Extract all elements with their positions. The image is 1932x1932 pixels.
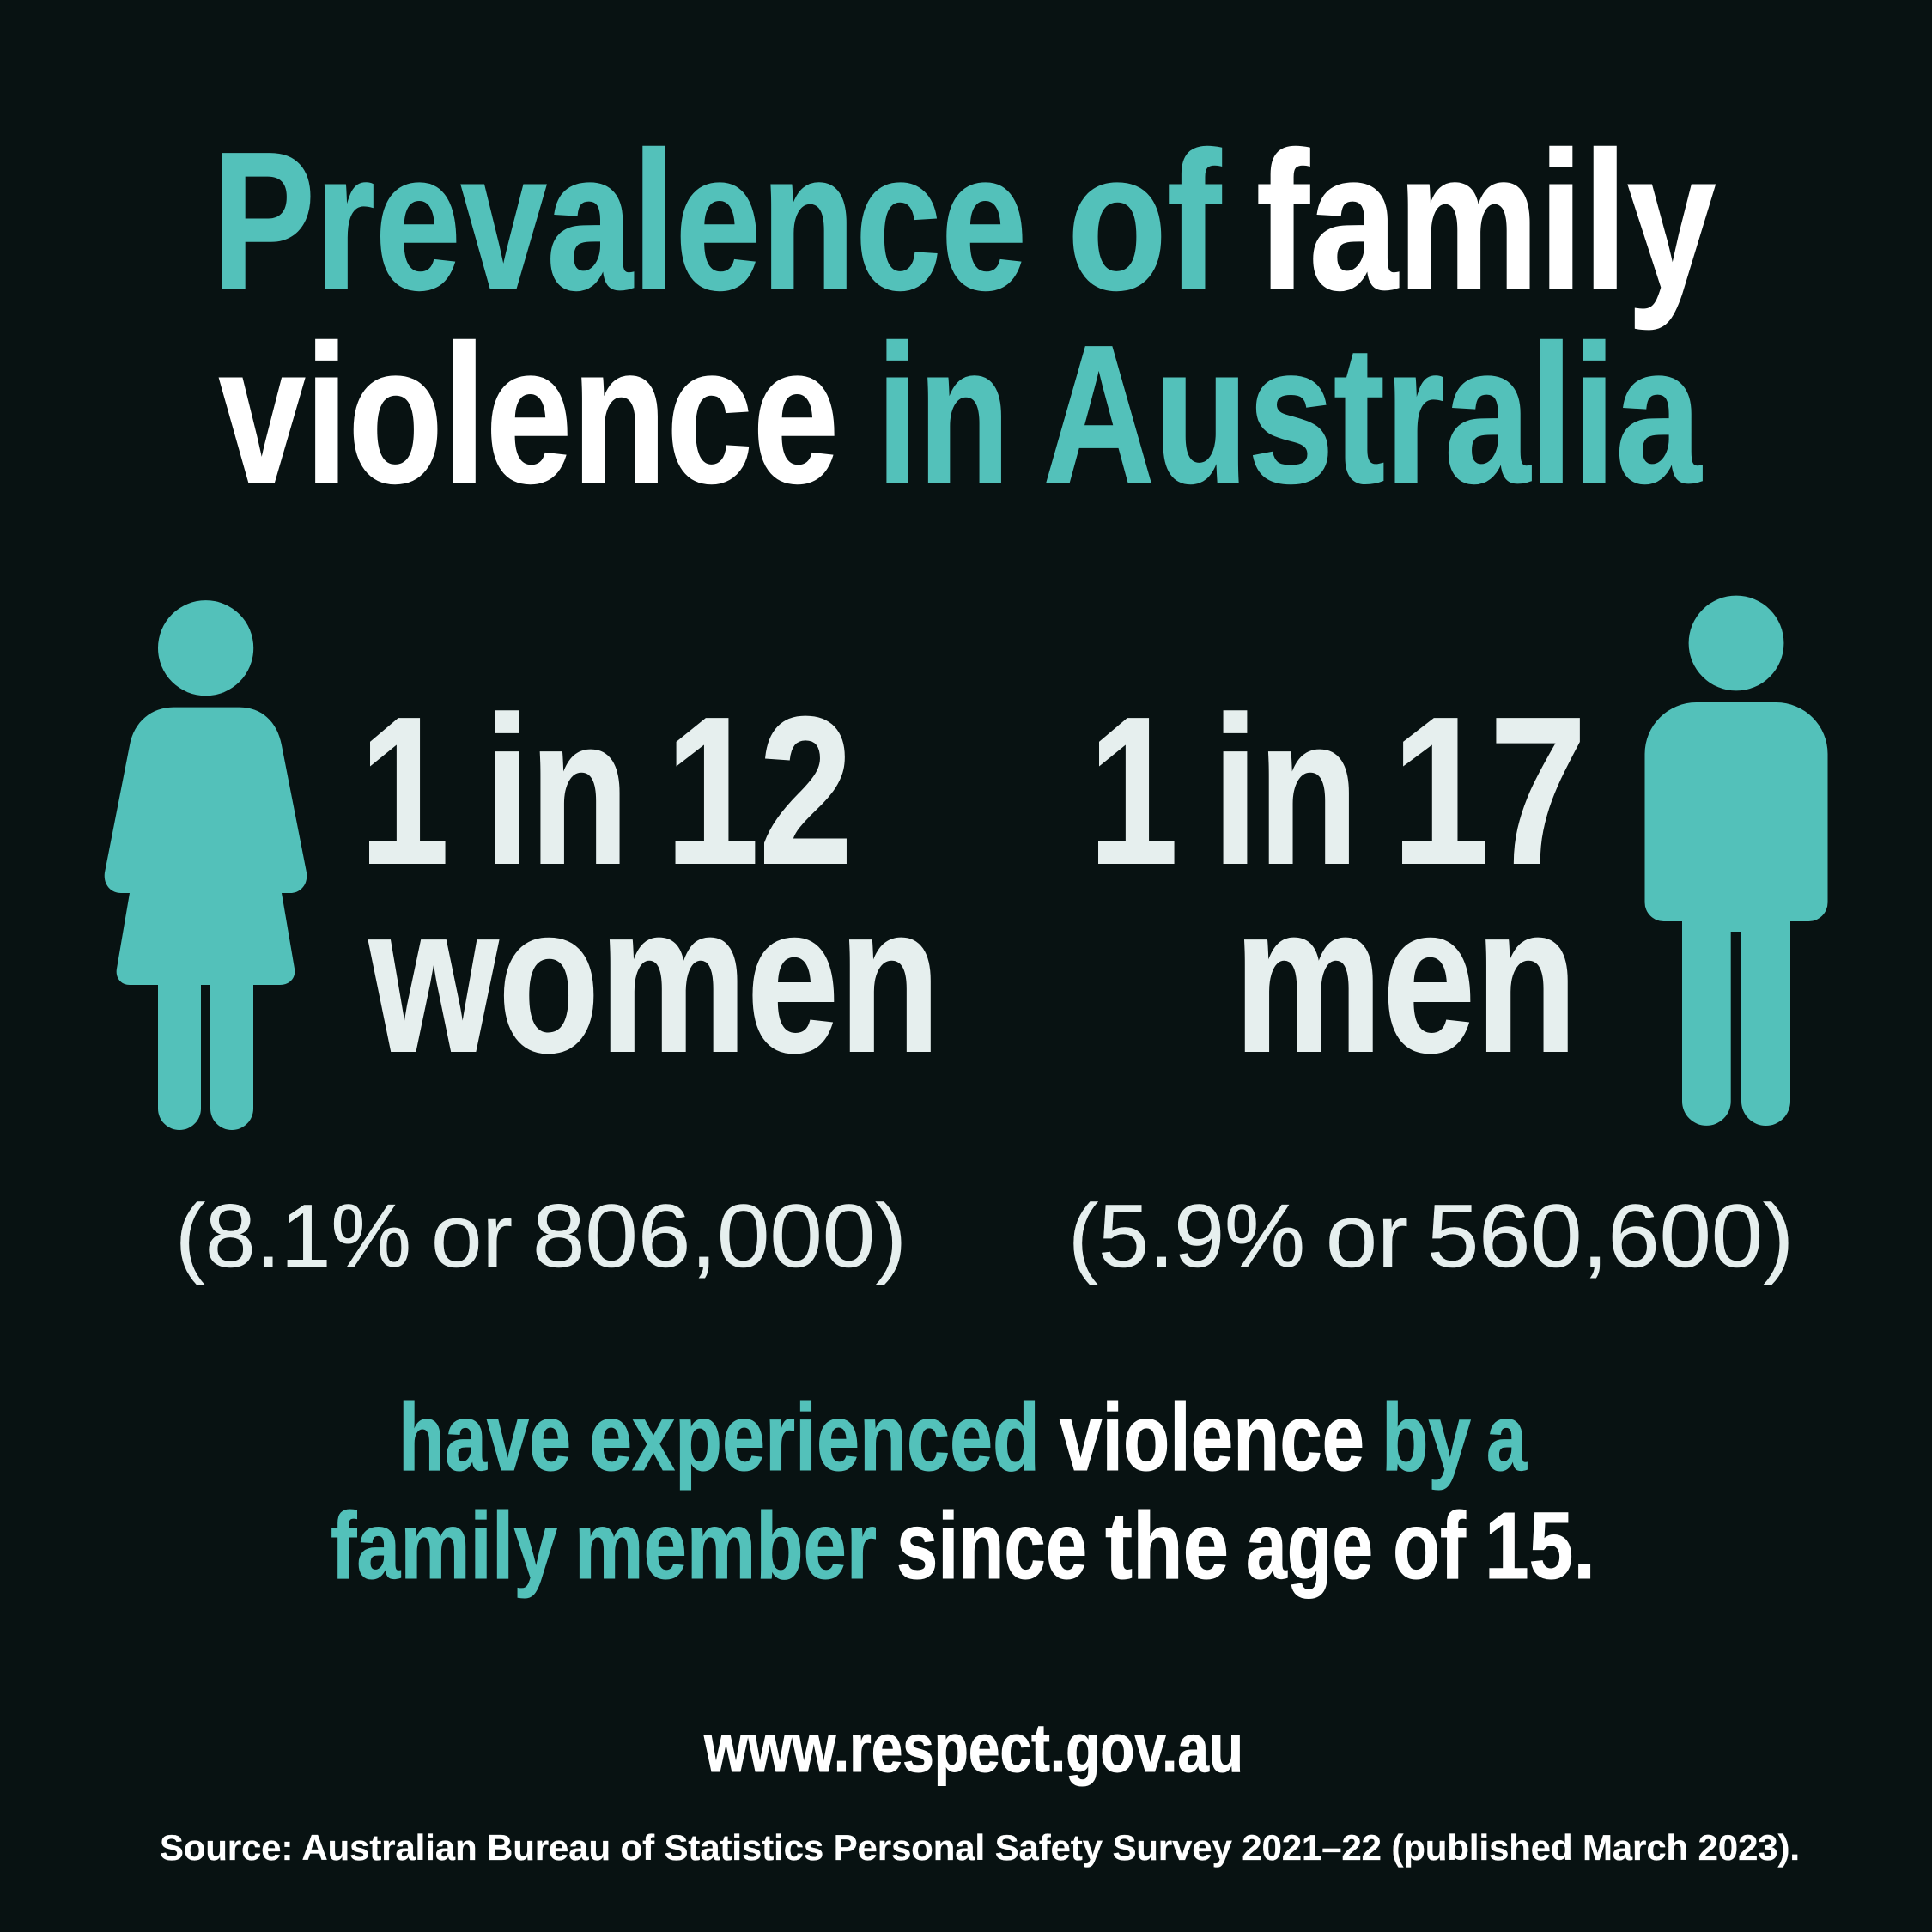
stat: 1 in 12 women: 12 [665,673,853,908]
statement text: experienced [589,1385,1040,1491]
statement text: have [398,1385,571,1491]
icon: man [1645,596,1827,1126]
stat: 8.1% or 806,000: or [431,1187,513,1286]
statement text: age [1246,1493,1373,1599]
website url: www.respect.gov.au [703,1710,1243,1786]
title: in [877,306,1010,524]
title: Prevalence [212,112,1027,331]
title: violence [219,306,839,524]
stat: 1 in 17 men: 17 [1392,673,1587,908]
stat: 8.1% or 806,000: (8.1% [175,1187,411,1286]
statement text: of [1393,1493,1466,1599]
stat: 1 in 17 men: 1 [1089,673,1178,908]
statement text: the [1105,1493,1229,1599]
statement text: violence [1060,1385,1364,1491]
source note: Source: Australian Bureau of Statistics Personal Safety Survey 2021–22 (published March 2023). [160,1827,1800,1868]
stat: 5.9% or 560,600: or [1326,1187,1408,1286]
title [212,112,1716,524]
statement text: member [574,1493,877,1599]
stat: 5.9% or 560,600: (5.9% [1068,1187,1305,1286]
stat: 8.1% or 806,000: 806,000) [532,1187,907,1286]
stat: 5.9% or 560,600 [1068,1187,1794,1286]
icon: woman [105,600,307,1130]
statement text [331,1385,1595,1599]
stat: 1 in 17 men: in [1212,673,1358,908]
title: family [1256,112,1716,331]
stat: 1 in 12 women: in [484,673,629,908]
stat: 1 in 12 women: 1 [360,673,449,908]
statement text: since [896,1493,1087,1599]
stat: 8.1% or 806,000 [175,1187,907,1286]
statement text: family [331,1493,557,1599]
stat: 5.9% or 560,600: 560,600) [1427,1187,1794,1286]
stat: 1 in 17 men: men [1234,861,1577,1096]
stat: 1 in 12 women [360,673,940,1096]
title: of [1067,112,1222,331]
statement text: by [1382,1385,1471,1491]
title: Australia [1043,306,1703,524]
statement text: 15. [1485,1493,1595,1599]
stat: 1 in 17 men [1089,673,1587,1096]
statement text: a [1486,1385,1528,1491]
stat: 1 in 12 women: women [368,861,940,1096]
